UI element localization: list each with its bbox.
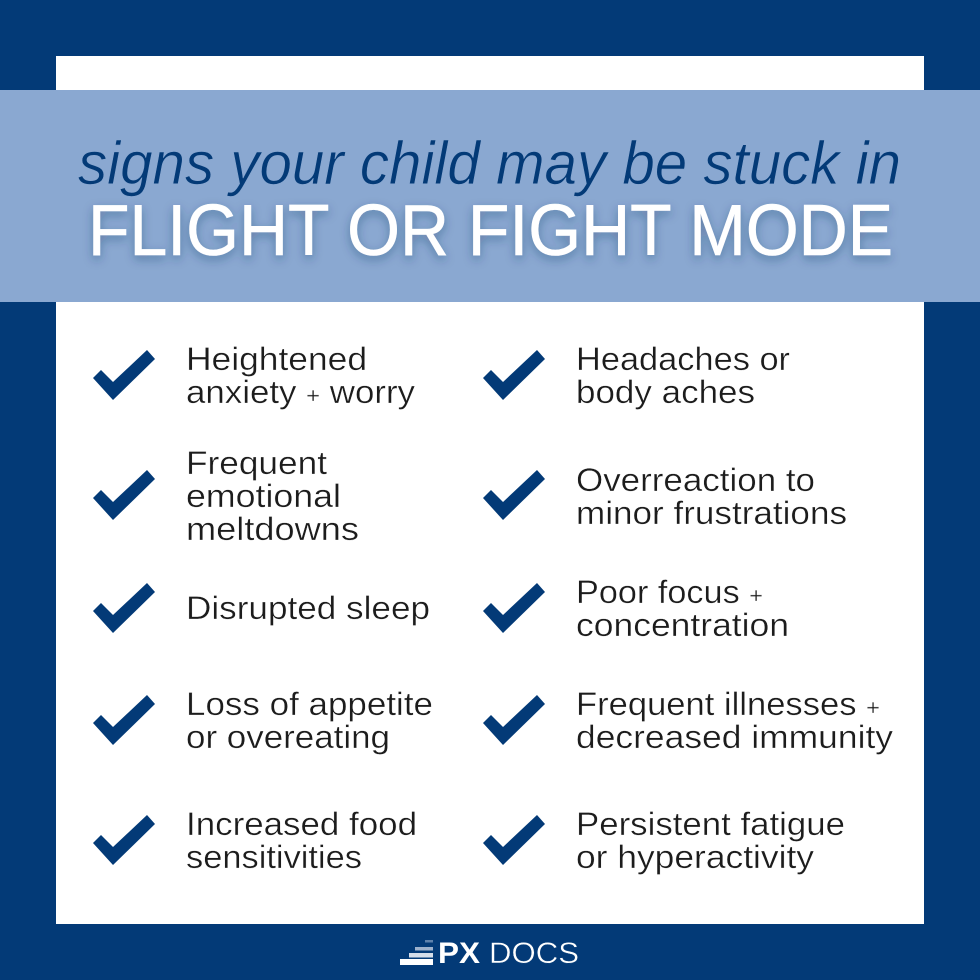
white content panel — [56, 56, 924, 924]
item: overreaction: Overreaction to — [576, 462, 815, 498]
item: fatigue — [483, 806, 845, 875]
item: poor focus: concentration — [576, 607, 789, 643]
item: overreaction: minor frustrations — [576, 495, 847, 531]
item: fatigue: Persistent fatigue — [576, 806, 845, 842]
item: heightened anxiety: anxiety + worry — [186, 374, 415, 410]
title: main line: FLIGHT OR FIGHT MODE — [88, 191, 893, 271]
item: appetite — [93, 686, 433, 755]
item: food sensitivities: Increased food — [186, 806, 417, 842]
item: emotional meltdowns: meltdowns — [186, 511, 359, 547]
item: fatigue: or hyperactivity — [576, 839, 814, 875]
item: food sensitivities: sensitivities — [186, 839, 362, 875]
item: heightened anxiety — [93, 341, 415, 410]
item: emotional meltdowns — [93, 445, 359, 547]
item: illnesses — [483, 686, 893, 755]
item: heightened anxiety: Heightened — [186, 341, 367, 377]
item: appetite: Loss of appetite — [186, 686, 433, 722]
item: illnesses: decreased immunity — [576, 719, 893, 755]
item: overreaction — [483, 462, 847, 531]
item: appetite: or overeating — [186, 719, 390, 755]
logo: PX Docs: PX — [438, 937, 480, 970]
item: disrupted sleep: Disrupted sleep — [186, 590, 430, 626]
item: disrupted sleep — [93, 583, 430, 633]
item: poor focus — [483, 574, 789, 643]
item: headaches: body aches — [576, 374, 755, 410]
title band — [0, 90, 980, 302]
logo: PX Docs: DOCS — [489, 937, 579, 970]
item: emotional meltdowns: Frequent — [186, 445, 327, 481]
item: food sensitivities — [93, 806, 417, 875]
item: poor focus: Poor focus + — [576, 574, 763, 610]
item: headaches — [483, 341, 790, 410]
title: italic line: signs your child may be stuck in — [78, 130, 901, 197]
item: illnesses: Frequent illnesses + — [576, 686, 880, 722]
icon: stairs — [400, 940, 433, 965]
item: headaches: Headaches or — [576, 341, 790, 377]
item: emotional meltdowns: emotional — [186, 478, 341, 514]
logo: PX Docs — [400, 937, 579, 970]
